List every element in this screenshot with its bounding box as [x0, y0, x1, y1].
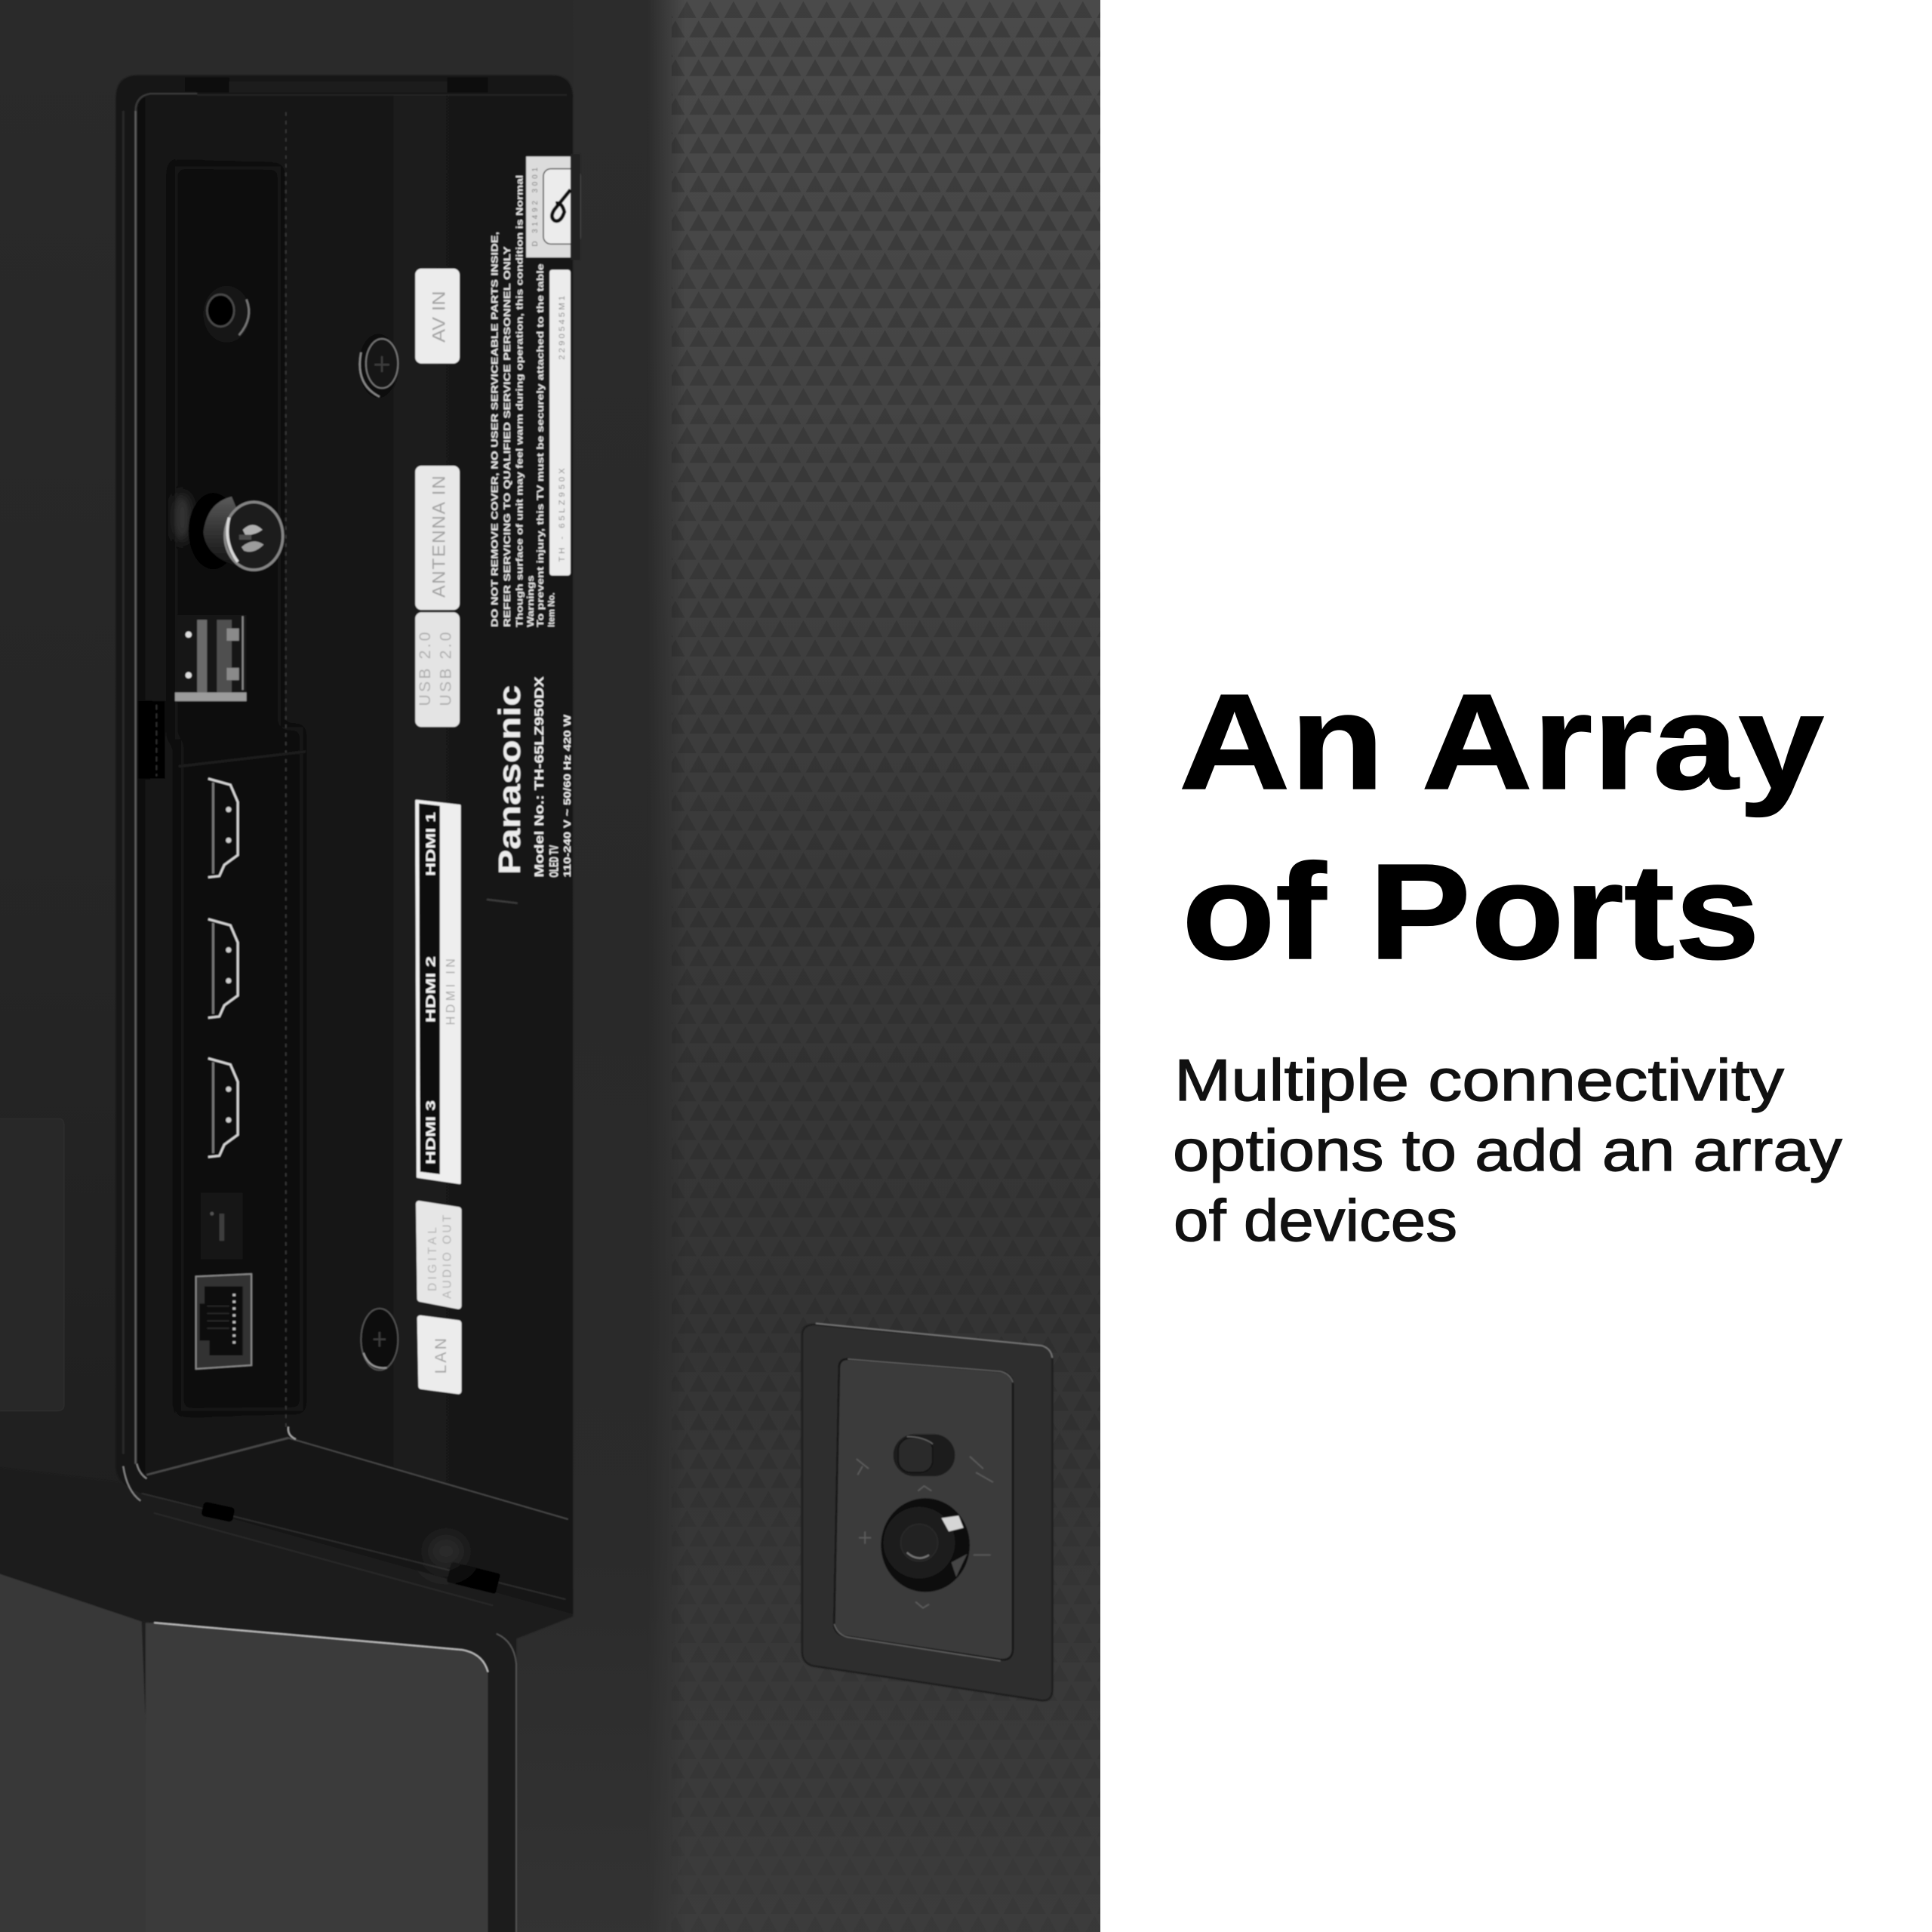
certification sticker	[526, 154, 580, 260]
label: ANTENNA IN	[415, 466, 460, 610]
screw: upper	[358, 334, 398, 398]
port recess	[115, 75, 573, 1614]
printed warning text: To prevent injury, this TV must be securely attached to the table	[536, 263, 546, 627]
rear shell background	[0, 0, 1134, 1932]
lower rear cover panel	[0, 1466, 573, 1932]
description text	[1173, 1047, 1842, 1254]
brand and model print	[492, 676, 573, 877]
title: of Ports	[1182, 836, 1760, 988]
port: antenna connector	[173, 493, 283, 570]
certification sticker: D 31492 3001	[531, 168, 540, 247]
joystick knob	[881, 1498, 970, 1592]
title	[1179, 666, 1824, 988]
label: USB 2.0	[415, 612, 460, 727]
panel: TV rear photo	[0, 0, 1100, 1932]
label: ANTENNA IN: ANTENNA IN	[429, 475, 449, 598]
port: HDMI 3	[208, 1058, 238, 1157]
label: HDMI group: HDMI 2	[423, 956, 438, 1023]
port: HDMI 2	[208, 919, 238, 1018]
label: AV IN	[415, 269, 460, 364]
port: USB stack	[175, 615, 247, 703]
toggle switch	[894, 1434, 955, 1476]
control module plate	[834, 1359, 1013, 1660]
brand and model print: Panasonic	[492, 685, 527, 875]
label: HDMI group	[417, 801, 460, 1183]
printed warning text	[491, 175, 557, 627]
serial number sticker: TH - 65LZ950X	[558, 468, 567, 561]
label: HDMI group: HDMI 3	[423, 1100, 438, 1164]
control module frame	[802, 1324, 1052, 1700]
brand and model print: OLED TV	[548, 845, 561, 877]
printed warning text: REFER SERVICING TO QUALIFIED SERVICE PERSONNEL ONLY	[503, 246, 512, 627]
printed warning text: Item No.	[547, 592, 557, 627]
port: optical audio	[201, 1192, 243, 1260]
port: HDMI 1	[208, 779, 238, 877]
label: DIGITAL AUDIO OUT: AUDIO OUT	[441, 1214, 454, 1299]
description text: Multiple connectivity	[1174, 1047, 1784, 1113]
serial number sticker	[549, 270, 571, 575]
brand and model print: 110-240 V ~ 50/60 Hz 420 W	[561, 714, 573, 877]
control module	[802, 1323, 1052, 1700]
port: AV in jack	[203, 286, 250, 343]
label: LAN: LAN	[432, 1338, 450, 1374]
serial number sticker: 2290545M1	[558, 296, 567, 360]
printed warning text: Though surface of unit may feel warm during operation, this condition is Normal	[515, 175, 525, 627]
label: USB 2.0: USB 2.0	[438, 632, 455, 706]
description text: options to add an array	[1173, 1117, 1842, 1183]
port: LAN	[196, 1274, 251, 1369]
control symbols	[857, 1457, 993, 1608]
label: HDMI group: HDMI 1	[423, 812, 438, 876]
text panel	[1173, 666, 1843, 1254]
label: USB 2.0: USB 2.0	[417, 632, 434, 706]
label: DIGITAL AUDIO OUT: DIGITAL	[426, 1227, 439, 1291]
printed warning text: DO NOT REMOVE COVER, NO USER SERVICEABLE PARTS INSIDE,	[491, 232, 500, 627]
brand and model print: Model No.: TH-65LZ950DX	[533, 676, 546, 877]
label: AV IN: AV IN	[429, 291, 449, 343]
printed warning text: Warnings	[526, 575, 536, 627]
description text: of devices	[1174, 1187, 1457, 1254]
screw: lower	[361, 1309, 398, 1371]
title: An Array	[1179, 666, 1824, 818]
label: HDMI group: HDMI IN	[444, 958, 457, 1025]
label: LAN	[420, 1318, 458, 1391]
label: DIGITAL AUDIO OUT	[419, 1204, 458, 1306]
